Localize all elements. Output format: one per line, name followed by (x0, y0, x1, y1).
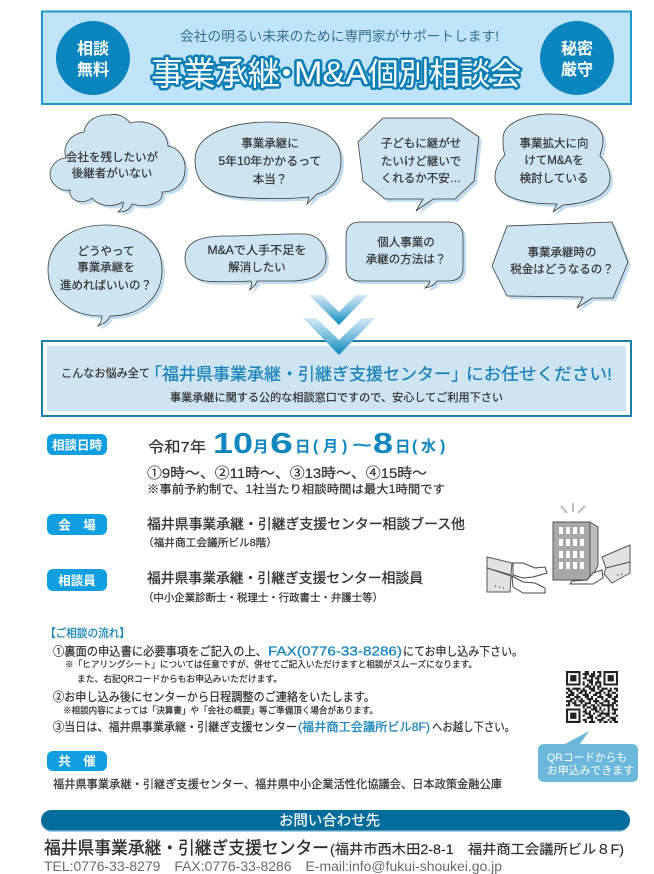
label: date: 相談日時 (52, 438, 102, 452)
event date: 日 (295, 439, 311, 456)
speech bubble: will children take over: くれるか不安… (381, 172, 461, 185)
centre name: 「福井県事業承継・引継ぎ支援センター」 (145, 364, 468, 384)
step 1: FAX(0776-33-8286) (268, 644, 402, 658)
speech bubble: no successor: 会社を残したいが (66, 150, 158, 164)
speech bubble: tax question: 事業承継時の (528, 246, 596, 259)
call to action: にお任せください! (466, 365, 612, 384)
flow heading: 【ご相談の流れ】 (45, 626, 130, 640)
event date: ( (412, 438, 418, 455)
speech bubble: will children take over: 子どもに継がせ (381, 136, 461, 150)
main title: 事業承継 (151, 55, 280, 92)
label: advisers: 相談員 (58, 573, 96, 588)
speech bubble: sole proprietor (346, 222, 466, 291)
speech bubble: 5 to 10 years: 5年10年かかるって (218, 154, 322, 168)
contact: organisation and address (44, 838, 624, 858)
event date: ) (342, 438, 347, 455)
event date: ( (313, 438, 319, 455)
speech bubble: how to proceed (48, 225, 165, 329)
badge: free consultation (56, 21, 130, 95)
speech bubble: expansion through M&A: 事業拡大に向 (520, 136, 588, 150)
speech bubble: how to proceed: どうやって (78, 245, 134, 258)
step 3: ③当日は、福井県事業承継・引継ぎ支援センター (53, 719, 297, 734)
badge: confidential: 秘密 (561, 40, 593, 58)
label: advisers (47, 569, 107, 591)
label: date (47, 434, 107, 455)
speech bubble: how to proceed: 進めればいいの？ (60, 279, 152, 292)
centre message panel (42, 341, 631, 416)
speech bubble: will children take over (358, 118, 482, 214)
consultation flow (45, 626, 523, 734)
speech bubble: tax question (492, 222, 631, 311)
footer bar: contact heading: お問い合わせ先 (279, 812, 380, 830)
speech bubble: expansion through M&A: けてM&Aを (524, 154, 584, 167)
event date: 令和7年 (148, 439, 206, 456)
label: venue (47, 514, 107, 535)
step 2 note: ※相談内容によっては「決算書」や「会社の概要」等ご準備頂く場合があります。 (63, 704, 378, 716)
contact: organisation and address: 福井県事業承継・引継ぎ支援センター (44, 838, 329, 858)
time slots: ①9時～、②11時～、③13時～、④15時～ (147, 465, 427, 481)
speech bubble: no successor: 後継者がいない (72, 166, 152, 180)
event date: 10 (213, 428, 253, 460)
label: co-hosts: 共 催 (58, 754, 96, 768)
step 3: (福井商工会議所ビル8F) (298, 719, 430, 734)
speech bubble: expansion through M&A: 検討している (520, 171, 588, 185)
illustration: handing over a company building (487, 503, 630, 593)
header tagline: 会社の明るい未来のために専門家がサポートします! (180, 29, 499, 44)
speech bubble: labour shortage: M&Aで人手不足を (208, 243, 306, 257)
event date: 水 (421, 438, 436, 455)
event date (148, 428, 445, 460)
speech bubble: tax question: 税金はどうなるの？ (510, 262, 614, 276)
main title: M&A (294, 55, 369, 91)
QR code (566, 672, 618, 722)
main title: 個別相談会 (368, 57, 521, 92)
event date: ~ (352, 435, 372, 455)
advisers text: （中小企業診断士・税理士・行政書士・弁護士等） (143, 591, 383, 604)
speech bubble: no successor (50, 114, 188, 215)
event date: 6 (270, 428, 293, 460)
badge: confidential: 厳守 (561, 60, 593, 79)
step 1 notes: ※「ヒアリングシート」については任意ですが、併せてご記入いただけますと相談がスムーズになります。 (65, 658, 477, 670)
label: venue: 会 場 (58, 518, 96, 532)
header panel (42, 12, 631, 104)
step 1: にてお申し込み下さい。 (403, 644, 523, 658)
callout: QR code: お申込みできます (547, 764, 634, 777)
step 3: へお越し下さい。 (432, 720, 515, 734)
venue text: 福井県事業承継・引継ぎ支援センター相談ブース他 (147, 516, 465, 532)
lead text: こんなお悩み全て (61, 366, 150, 380)
badge: confidential (540, 21, 614, 95)
advisers text: 福井県事業承継・引継ぎ支援センター相談員 (147, 570, 423, 586)
speech bubble: labour shortage: 解消したい (228, 260, 286, 274)
speech bubble: sole proprietor: 個人事業の (377, 236, 435, 249)
main title (151, 55, 521, 92)
step 1 (53, 644, 523, 658)
speech bubble: expansion through M&A (495, 114, 613, 215)
speech bubble: sole proprietor: 承継の方法は？ (366, 252, 446, 266)
footer bar: contact heading (41, 810, 630, 832)
reservation note: ※事前予約制で、1社当たり相談時間は最大1時間です (147, 482, 445, 496)
reassurance text: 事業承継に関する公的な相談窓口ですので、安心してご利用下さい (170, 390, 503, 404)
label: co-hosts (47, 751, 107, 771)
venue text: （福井商工会議所ビル8階） (143, 536, 277, 549)
event date: ) (440, 438, 445, 455)
advisers text (143, 570, 423, 604)
venue text (143, 516, 465, 549)
step 3 (53, 719, 515, 734)
callout: QR code (538, 731, 638, 782)
co-host organisations: 福井県事業承継・引継ぎ支援センター、福井県中小企業活性化協議会、日本政策金融公庫 (53, 777, 502, 791)
step 1: ①裏面の申込書に必要事項をご記入の上、 (53, 644, 267, 658)
step 2: ②お申し込み後にセンターから日程調整のご連絡をいたします。 (53, 689, 375, 704)
arrow: double chevron (303, 295, 375, 355)
event date: 月 (323, 438, 338, 455)
speech bubble: how to proceed: 事業承継を (77, 261, 135, 274)
badge: free consultation: 相談 (77, 40, 109, 58)
contact: organisation and address: (福井市西木田2-8-1 福井商工会議所ビル８F) (330, 841, 624, 857)
speech bubble: 5 to 10 years: 事業承継に (241, 137, 299, 150)
callout: QR code: QRコードからも (547, 751, 627, 764)
speech bubble: will children take over: たいけど継いで (381, 155, 461, 168)
event date: 日 (395, 439, 411, 456)
badge: free consultation: 無料 (77, 61, 109, 79)
step 1 notes (65, 658, 477, 684)
contact: phone fax email: TEL:0776-33-8279 FAX:0776-33-8286 E-mail:info@fukui-shoukei.go.jp (44, 859, 502, 874)
main title: ・ (270, 55, 303, 92)
step 1 notes: また、右記QRコードからもお申込みいただけます。 (77, 673, 282, 684)
event date: 月 (253, 439, 269, 456)
speech bubble: 5 to 10 years (195, 122, 344, 207)
event date: 8 (373, 428, 393, 460)
speech bubble: labour shortage (185, 234, 329, 293)
speech bubble: 5 to 10 years: 本当？ (253, 172, 287, 186)
